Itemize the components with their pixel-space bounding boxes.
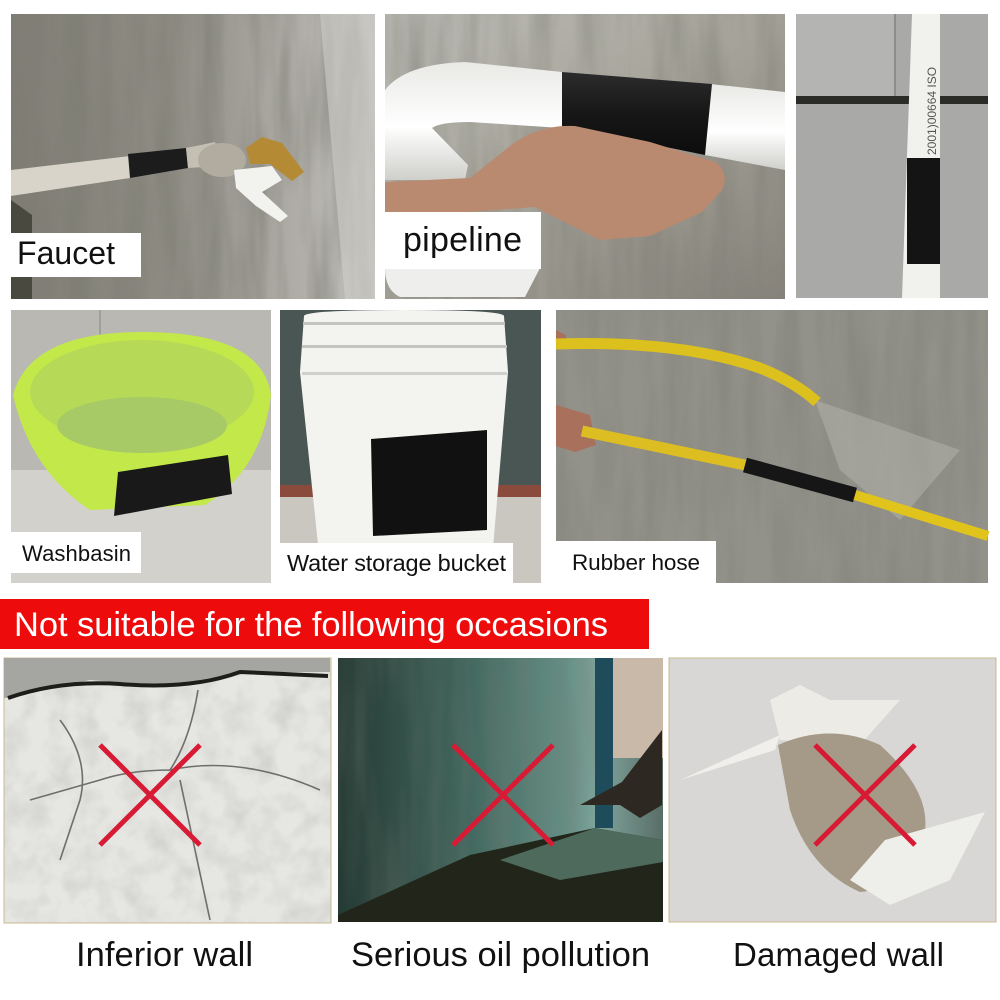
icon: red cross — [815, 745, 915, 845]
icon: pointing hand — [580, 730, 662, 818]
panel: water storage bucket — [280, 310, 541, 583]
icon: spraying water — [815, 400, 960, 520]
caption: Serious oil pollution: Serious oil pollution — [351, 936, 650, 974]
icon: yellow hoses with tape — [556, 344, 988, 536]
panel: washbasin — [11, 310, 271, 583]
panel: pipeline — [385, 14, 785, 299]
icon: green basin — [13, 332, 271, 516]
icon: white bucket — [300, 310, 508, 583]
icon: white pipe with black tape — [385, 62, 785, 297]
panel: inferior wall — [4, 658, 331, 923]
label: pipeline — [385, 212, 541, 269]
label: Washbasin: Washbasin — [22, 541, 131, 566]
caption: Inferior wall: Inferior wall — [76, 936, 253, 974]
caption: Damaged wall: Damaged wall — [733, 936, 944, 973]
heading banner: not suitable — [0, 599, 649, 649]
panel: serious oil pollution — [338, 658, 663, 922]
icon: faucet pipe with tape — [11, 137, 304, 222]
panel: wall pipe — [796, 14, 988, 298]
label: pipeline: pipeline — [403, 221, 522, 259]
label: Rubber hose — [556, 541, 716, 583]
panel: faucet — [11, 14, 375, 299]
label: Faucet: Faucet — [17, 235, 115, 271]
icon: hand — [385, 126, 725, 240]
label: Water storage bucket — [280, 543, 513, 583]
icon: vertical pipe with tape — [902, 14, 940, 298]
label: Washbasin — [11, 532, 141, 573]
icon: vertical pipe with tape: 2001)00664 ISO — [925, 67, 939, 155]
icon: red cross — [453, 745, 553, 845]
icon: red cross — [100, 745, 200, 845]
icon: hand holding hoses — [556, 330, 596, 452]
panel: damaged wall — [669, 658, 996, 922]
label: Rubber hose: Rubber hose — [572, 550, 700, 575]
crack lines — [8, 672, 328, 920]
label: Faucet — [11, 233, 141, 277]
label: Water storage bucket: Water storage bucket — [287, 550, 506, 576]
heading banner: not suitable: Not suitable for the following occasions — [14, 606, 608, 644]
panel: rubber hose — [556, 310, 988, 583]
icon: wall hole — [680, 685, 985, 905]
